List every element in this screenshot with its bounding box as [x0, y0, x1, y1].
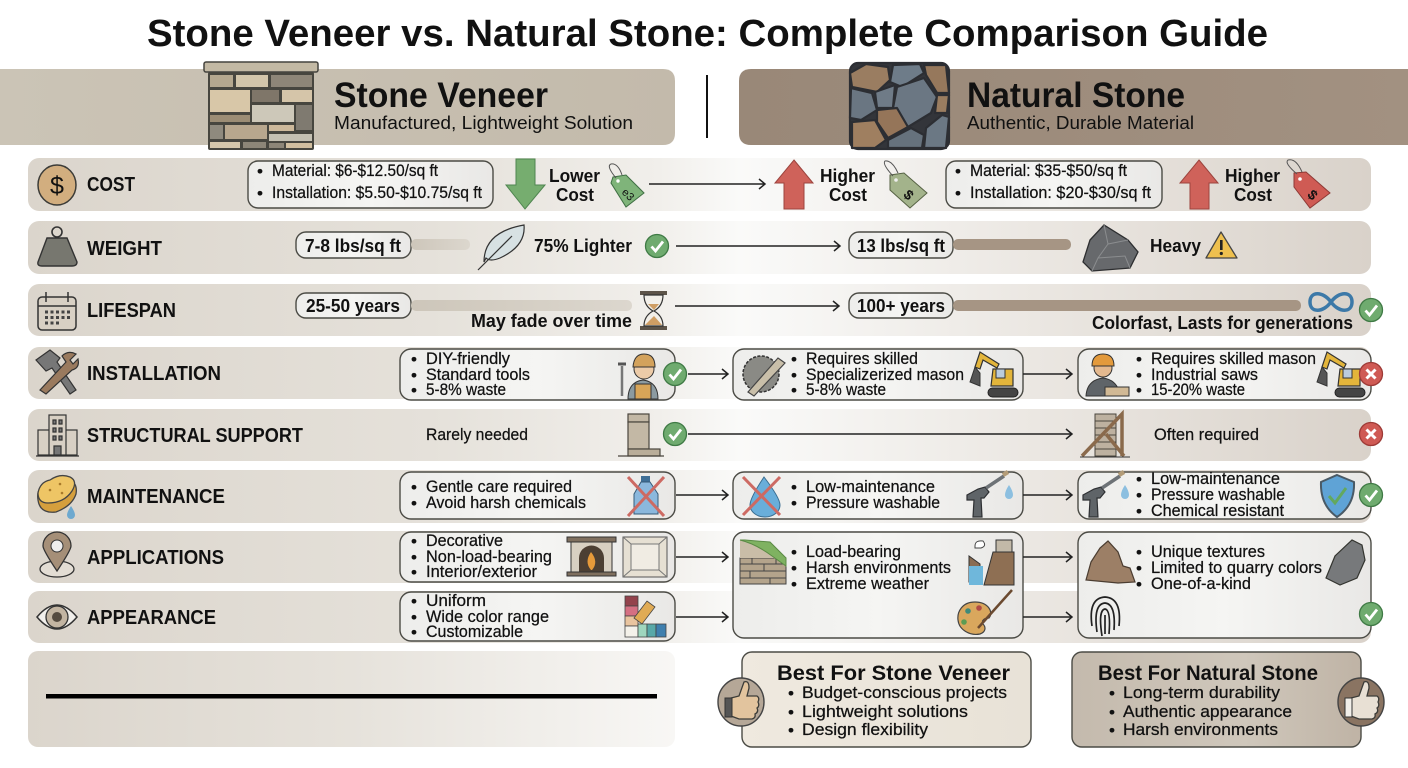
- icon: hourglass: [640, 291, 667, 330]
- icon: check: [1360, 602, 1382, 626]
- card: natural applications and appearance: One-of-a-kind: [1151, 574, 1251, 593]
- text: lower cost: Cost: [556, 185, 594, 205]
- subheading: natural stone: Authentic, Durable Material: [967, 113, 1194, 133]
- text: higher cost: Cost: [1234, 185, 1272, 205]
- icon: fingerprint: [1091, 597, 1119, 636]
- icon: pressure washer: [967, 472, 1013, 517]
- arrow: applications 1: [676, 552, 728, 562]
- label: installation: INSTALLATION: [87, 363, 221, 385]
- icon: green price tag: e3: [619, 186, 636, 204]
- icon: check: [664, 362, 686, 386]
- arrow: structural veneer to natural: [688, 429, 1072, 439]
- label: cost: COST: [87, 174, 135, 196]
- icon: shield: [1321, 475, 1354, 517]
- icon: hammer and wrench: [36, 350, 78, 394]
- row: weight: [28, 221, 1371, 274]
- card: natural installation: [1078, 349, 1371, 400]
- icon: retaining wall: [740, 540, 786, 584]
- card: veneer appearance: •: [411, 608, 417, 627]
- card: veneer installation: Standard tools: [426, 365, 530, 384]
- heading: natural stone: Natural Stone: [967, 76, 1185, 115]
- text: may fade: May fade over time: [471, 311, 632, 331]
- icon: brown rock: [1086, 541, 1135, 583]
- card: middle maintenance: [733, 472, 1023, 519]
- text: higher cost: Higher: [820, 166, 875, 186]
- center divider: [706, 75, 708, 138]
- arrow: installation 1: [688, 369, 728, 379]
- icon: framed stone panel: [623, 537, 667, 577]
- icon: diy worker: [618, 354, 658, 399]
- bar: veneer lifespan: [411, 300, 632, 311]
- thick rule: [46, 694, 657, 698]
- card: specialized installation: •: [791, 366, 797, 385]
- list: natural best uses: •: [1109, 721, 1115, 740]
- pill: natural weight: 13 lbs/sq ft: [857, 236, 945, 256]
- card: natural maintenance: •: [1136, 470, 1142, 489]
- text: rarely needed: Rarely needed: [426, 425, 528, 444]
- list: natural best uses: •: [1109, 703, 1115, 722]
- bar: natural weight: [953, 239, 1071, 250]
- icon: olive price tag: [884, 161, 927, 208]
- card: veneer installation: 5-8% waste: [426, 380, 506, 399]
- row: installation: [28, 347, 1382, 400]
- icon: excavator: [970, 352, 1018, 397]
- panel: natural stone header: [739, 63, 1408, 149]
- row: structural support: [28, 409, 1382, 461]
- icon: saw and ruler: [743, 356, 785, 396]
- text: 75% lighter: 75% Lighter: [534, 236, 632, 256]
- card: middle maintenance: Low-maintenance: [806, 477, 935, 496]
- list: natural best uses: Harsh environments: [1123, 720, 1278, 739]
- label: lifespan: LIFESPAN: [87, 300, 176, 322]
- icon: paint palette: [958, 590, 1012, 634]
- list: natural best uses: Authentic appearance: [1123, 702, 1292, 721]
- icon: crossed-out bottle: [628, 476, 664, 516]
- card: natural applications and appearance: •: [1136, 575, 1142, 594]
- card: veneer appearance: Wide color range: [426, 607, 549, 626]
- heading: stone veneer: Stone Veneer: [334, 76, 548, 115]
- list: veneer best uses: •: [788, 703, 794, 722]
- icon: color swatches: [625, 596, 666, 637]
- card: veneer appearance: [400, 591, 675, 642]
- icon: dollar coin: [38, 165, 76, 205]
- icon: check: [1360, 298, 1382, 322]
- card: veneer applications: Non-load-bearing: [426, 547, 552, 566]
- list: veneer best uses: Lightweight solutions: [802, 702, 968, 721]
- card: middle maintenance: Pressure washable: [806, 493, 940, 512]
- card: veneer appearance: Customizable: [426, 622, 523, 641]
- subheading: stone veneer: Manufactured, Lightweight Solution: [334, 113, 633, 133]
- row: appearance: [28, 591, 1371, 643]
- card: veneer cost: •: [257, 162, 263, 181]
- arrow: applications 2: [1023, 552, 1072, 562]
- icon: feather: [478, 225, 524, 270]
- card: veneer cost: Installation: $5.50-$10.75/sq ft: [272, 183, 482, 202]
- icon: x mark: [1360, 362, 1382, 386]
- pill: veneer lifespan: [296, 293, 411, 318]
- panel: best for stone veneer: [718, 652, 1031, 747]
- card: natural installation: Requires skilled mason: [1151, 349, 1316, 368]
- arrow: appearance 2: [1023, 612, 1072, 622]
- icon: calendar: [38, 292, 76, 330]
- card: specialized installation: •: [791, 350, 797, 369]
- text: higher cost: Cost: [829, 185, 867, 205]
- icon: kettle weight: [38, 227, 77, 266]
- icon: building: [36, 415, 79, 456]
- arrow: weight veneer to natural: [676, 241, 840, 251]
- card: veneer maintenance: •: [411, 494, 417, 513]
- card: natural maintenance: Chemical resistant: [1151, 501, 1284, 520]
- icon: natural stone wall: [850, 63, 949, 149]
- icon: veneer wall: [204, 62, 318, 150]
- card: natural maintenance: Low-maintenance: [1151, 469, 1280, 488]
- icon: mason: [1086, 354, 1129, 396]
- row: cost: [28, 158, 1371, 211]
- arrow: installation 2: [1023, 369, 1072, 379]
- card: middle applications and appearance: •: [791, 543, 797, 562]
- icon: location pin: [40, 532, 74, 577]
- heading: best for natural stone: Best For Natural Stone: [1098, 662, 1318, 685]
- icon: warning triangle: [1206, 232, 1237, 258]
- icon: red price tag: $: [1304, 186, 1321, 203]
- card: veneer maintenance: Gentle care required: [426, 477, 572, 496]
- card: natural cost: Installation: $20-$30/sq ft: [970, 183, 1151, 202]
- list: natural best uses: [1109, 683, 1292, 740]
- card: natural installation: 15-20% waste: [1151, 380, 1245, 399]
- icon: olive price tag: $: [900, 186, 917, 203]
- icon: red up arrow: [1180, 160, 1218, 209]
- card: natural installation: Industrial saws: [1151, 365, 1258, 384]
- list: natural best uses: •: [1109, 684, 1115, 703]
- heading: best for stone veneer: Best For Stone Veneer: [777, 662, 1010, 685]
- label: weight: WEIGHT: [87, 238, 162, 260]
- card: natural cost: [946, 161, 1162, 208]
- card: veneer maintenance: •: [411, 478, 417, 497]
- card: veneer appearance: •: [411, 592, 417, 611]
- arrow: cost veneer to natural: [649, 179, 765, 189]
- card: veneer cost: Material: $6-$12.50/sq ft: [272, 161, 438, 180]
- list: veneer best uses: Budget-conscious projects: [802, 683, 1007, 702]
- list: veneer best uses: [788, 683, 1007, 740]
- icon: red price tag: [1287, 160, 1330, 208]
- row: maintenance: [28, 469, 1382, 523]
- card: veneer cost: [248, 161, 493, 208]
- arrow: lifespan veneer to natural: [675, 301, 839, 311]
- icon: red up arrow: [775, 160, 813, 209]
- card: natural maintenance: •: [1136, 502, 1142, 521]
- text: often required: Often required: [1154, 425, 1259, 444]
- text: lower cost: [549, 166, 600, 205]
- label: structural support: STRUCTURAL SUPPORT: [87, 425, 303, 447]
- icon: column: [618, 414, 664, 456]
- icon: braced wall: [1080, 414, 1130, 457]
- pill: veneer lifespan: 25-50 years: [306, 296, 400, 316]
- card: veneer appearance: •: [411, 623, 417, 642]
- card: natural installation: •: [1136, 366, 1142, 385]
- card: middle applications and appearance: •: [791, 575, 797, 594]
- card: veneer cost: •: [257, 184, 263, 203]
- icon: fireplace: [567, 537, 616, 576]
- card: specialized installation: [733, 349, 1023, 400]
- icon: green down arrow: [506, 159, 545, 209]
- text: lower cost: Lower: [549, 166, 600, 186]
- panel: best for natural stone: [1072, 652, 1384, 747]
- card: veneer applications: Decorative: [426, 531, 503, 550]
- card: veneer applications: •: [411, 548, 417, 567]
- card: veneer appearance: Uniform: [426, 591, 486, 610]
- panel: stone veneer header: [0, 62, 675, 150]
- icon: thumbs up natural: [1338, 678, 1384, 726]
- card: natural applications and appearance: [1078, 532, 1371, 638]
- icon: pressure washer: [1083, 472, 1129, 517]
- list: veneer best uses: Design flexibility: [802, 720, 929, 739]
- label: appearance: APPEARANCE: [87, 607, 216, 629]
- card: natural installation: •: [1136, 381, 1142, 400]
- card: veneer installation: •: [411, 366, 417, 385]
- title: Stone Veneer vs. Natural Stone: Complete Comparison Guide: [147, 13, 1268, 55]
- card: veneer maintenance: Avoid harsh chemicals: [426, 493, 586, 512]
- pill: natural lifespan: 100+ years: [857, 296, 945, 316]
- pill: natural weight: [849, 232, 953, 258]
- card: natural applications and appearance: •: [1136, 559, 1142, 578]
- card: veneer installation: •: [411, 381, 417, 400]
- card: middle maintenance: •: [791, 494, 797, 513]
- card: specialized installation: Specializerized mason: [806, 365, 964, 384]
- icon: sponge: [38, 476, 76, 519]
- icon: eye: [37, 605, 77, 629]
- card: specialized installation: •: [791, 381, 797, 400]
- panel: bottom blank: [28, 651, 675, 747]
- card: natural installation: •: [1136, 350, 1142, 369]
- card: middle applications and appearance: [733, 532, 1023, 638]
- icon: green price tag: [609, 164, 644, 207]
- icon: check: [664, 422, 686, 446]
- pill: veneer weight: [296, 232, 411, 258]
- card: natural maintenance: Pressure washable: [1151, 485, 1285, 504]
- card: natural maintenance: •: [1136, 486, 1142, 505]
- card: veneer maintenance: [400, 472, 675, 519]
- arrow: maintenance 1: [676, 490, 728, 500]
- icon: dollar coin: $: [50, 172, 64, 200]
- icon: excavator: [1317, 352, 1365, 397]
- card: veneer applications: •: [411, 532, 417, 551]
- arrow: maintenance 2: [1023, 490, 1072, 500]
- list: natural best uses: Long-term durability: [1123, 683, 1281, 702]
- row: applications: [28, 531, 1371, 583]
- card: veneer installation: DIY-friendly: [426, 349, 510, 368]
- card: middle applications and appearance: Extreme weather: [806, 574, 929, 593]
- icon: crossed-out water drop: [743, 477, 780, 517]
- text: heavy: Heavy: [1150, 236, 1201, 256]
- card: natural applications and appearance: •: [1136, 543, 1142, 562]
- card: middle applications and appearance: Load-bearing: [806, 542, 901, 561]
- bar: veneer weight: [411, 239, 470, 250]
- text: higher cost: Higher: [1225, 166, 1280, 186]
- text: colorfast: Colorfast, Lasts for generations: [1092, 313, 1353, 333]
- card: natural maintenance: [1078, 469, 1371, 521]
- pill: veneer weight: 7-8 lbs/sq ft: [305, 236, 401, 256]
- card: middle applications and appearance: Harsh environments: [806, 558, 951, 577]
- row: lifespan: [28, 284, 1382, 336]
- card: veneer applications: •: [411, 563, 417, 582]
- card: specialized installation: Requires skilled: [806, 349, 918, 368]
- icon: grey rock: [1326, 540, 1365, 585]
- card: natural cost: •: [955, 184, 961, 203]
- icon: check: [646, 234, 668, 258]
- card: veneer installation: [400, 349, 675, 400]
- card: veneer applications: [400, 531, 675, 582]
- label: maintenance: MAINTENANCE: [87, 486, 225, 508]
- label: applications: APPLICATIONS: [87, 547, 224, 569]
- icon: heavy rock: [1083, 225, 1138, 271]
- card: middle maintenance: •: [791, 478, 797, 497]
- icon: x mark: [1360, 422, 1382, 446]
- card: middle applications and appearance: •: [791, 559, 797, 578]
- card: natural cost: •: [955, 162, 961, 181]
- icon: check: [1360, 484, 1382, 506]
- list: veneer best uses: •: [788, 721, 794, 740]
- card: veneer applications: Interior/exterior: [426, 562, 537, 581]
- text: higher cost: [820, 166, 875, 205]
- card: natural applications and appearance: Unique textures: [1151, 542, 1265, 561]
- list: veneer best uses: •: [788, 684, 794, 703]
- icon: infinity: [1310, 294, 1352, 310]
- icon: thumbs up veneer: [718, 678, 764, 726]
- bar: natural lifespan: [953, 300, 1301, 311]
- icon: cliff and building: [969, 540, 1014, 585]
- card: natural cost: Material: $35-$50/sq ft: [970, 161, 1127, 180]
- arrow: appearance 1: [676, 612, 728, 622]
- card: specialized installation: 5-8% waste: [806, 380, 886, 399]
- card: natural applications and appearance: Limited to quarry colors: [1151, 558, 1322, 577]
- text: higher cost: [1225, 166, 1280, 205]
- card: veneer installation: •: [411, 350, 417, 369]
